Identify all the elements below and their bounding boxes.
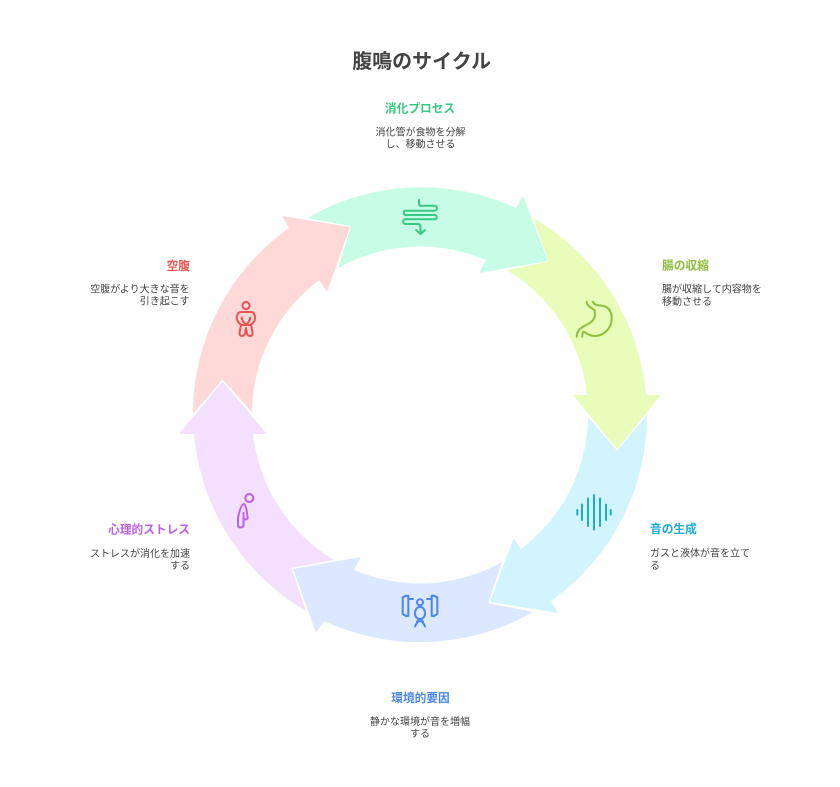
label: environmental factors: 環境的要因 [391,691,450,705]
label: sound generation: る [650,560,660,572]
label: intestinal contraction [662,258,762,308]
label: digestion process [376,102,466,150]
label: psychological stress: 心理的ストレス [108,522,190,536]
label: empty stomach: 空腹がより大きな音を [90,282,190,296]
label: empty stomach [90,259,190,308]
label: digestion process: 消化プロセス [385,102,455,116]
label: psychological stress: ストレスが消化を加速 [90,547,190,560]
icon: person holding belly [237,302,255,336]
arrow: light blue sound generation [490,415,647,613]
label: sound generation: 音の生成 [650,522,697,536]
icon: person between walls [403,596,437,626]
label: intestinal contraction: 腸の収縮 [662,258,709,272]
icon: stomach [577,302,612,337]
arrow: indigo environment [293,557,533,642]
label: intestinal contraction: 移動させる [662,295,712,308]
icon: intestine [403,200,437,234]
label: environmental factors [370,691,470,740]
label: sound generation [650,522,750,572]
label: environmental factors: 静かな環境が音を増幅 [370,715,470,728]
label: psychological stress [90,522,190,572]
arrow: pink hunger [193,216,350,414]
label: empty stomach: 空腹 [167,259,190,273]
title: 腹鳴のサイクル [352,50,491,73]
arrow: yellow contraction [507,218,661,449]
label: empty stomach: 引き起こす [140,296,190,308]
arrow: green digestion [307,187,548,273]
label: environmental factors: する [410,728,430,740]
label: intestinal contraction: 腸が収縮して内容物を [662,282,762,296]
label: digestion process: 消化管が食物を分解 [376,126,466,138]
icon: stressed person [238,494,253,528]
label: sound generation: ガスと液体が音を立て [650,546,750,560]
label: digestion process: し、移動させる [386,138,456,150]
label: psychological stress: する [170,560,190,572]
arrow: purple stress [179,382,334,611]
icon: sound wave [577,495,611,530]
